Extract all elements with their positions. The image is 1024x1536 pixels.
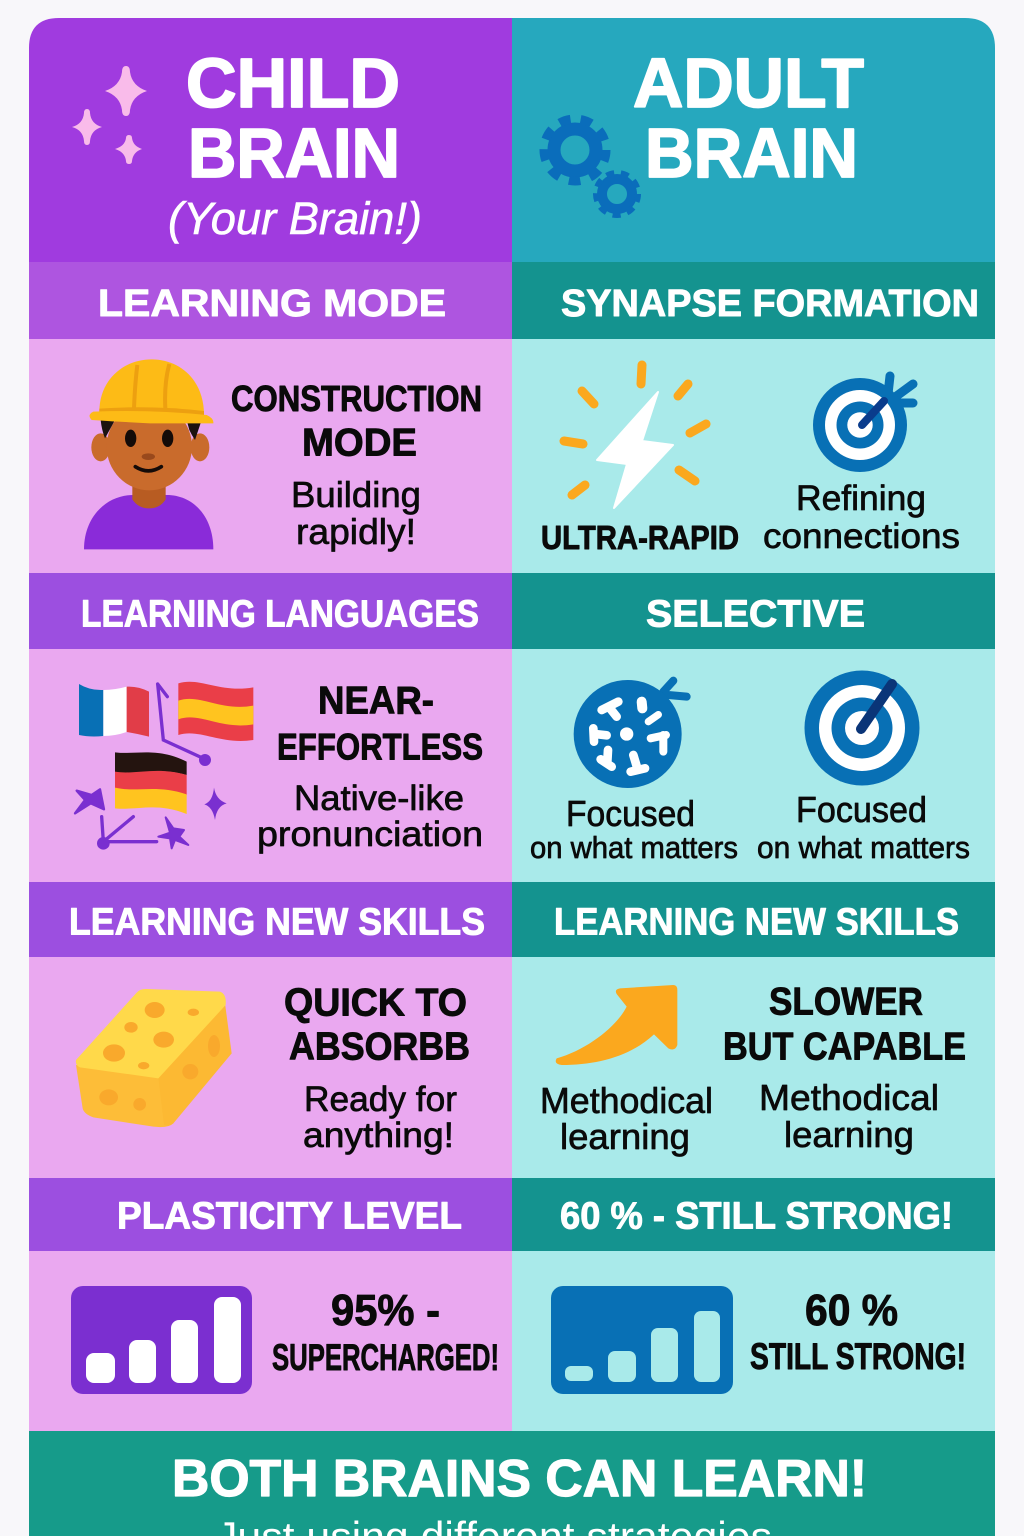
text: construction mode: CONSTRUCTION	[231, 378, 482, 419]
text: quick to absorb: ABSORBB	[289, 1026, 470, 1068]
panel: focused	[512, 649, 995, 882]
section band: still strong	[512, 1178, 995, 1251]
text: near-effortless: pronunciation	[257, 815, 483, 854]
icon: child construction worker	[84, 359, 213, 549]
text: methodical learning right	[759, 1077, 939, 1155]
subheading: your brain: (Your Brain!)	[168, 193, 422, 244]
icon: gears	[544, 119, 638, 215]
section band: synapse formation: SYNAPSE FORMATION	[561, 283, 979, 325]
heading: adult brain: BRAIN	[645, 114, 858, 192]
panel: construction mode	[29, 339, 512, 573]
panel: plasticity adult	[512, 1251, 995, 1431]
text: slower but capable: SLOWER	[769, 980, 923, 1024]
text: quick to absorb: QUICK TO	[284, 982, 467, 1024]
section band: learning new skills child: LEARNING NEW SKILLS	[69, 902, 485, 944]
heading: child brain	[186, 44, 400, 192]
section band: learning languages: LEARNING LANGUAGES	[81, 594, 479, 636]
text: focused right: on what matters	[757, 830, 970, 865]
heading: child brain: CHILD	[186, 44, 400, 122]
icon: language flags and connections	[75, 682, 253, 850]
footer heading: BOTH BRAINS CAN LEARN!	[172, 1450, 867, 1508]
text: methodical learning right: Methodical	[759, 1077, 939, 1118]
text: near-effortless: NEAR-	[318, 680, 434, 722]
icon: target with splash	[813, 376, 913, 472]
text: near-effortless: EFFORTLESS	[277, 726, 483, 768]
icon: sponge	[76, 989, 232, 1127]
text: ultra-rapid: ULTRA-RAPID	[541, 519, 739, 556]
panel: slower but capable	[512, 957, 995, 1178]
section band: learning mode: LEARNING MODE	[98, 283, 446, 325]
section band: learning languages	[29, 573, 512, 649]
icon: upward arrow	[556, 985, 677, 1065]
text: focused left: Focused	[566, 793, 695, 834]
text: 60 percent	[750, 1286, 966, 1377]
icon: filtered neuron circle	[574, 680, 687, 788]
panel: ultra-rapid and refining	[512, 339, 995, 573]
text: construction mode	[231, 378, 482, 552]
text: construction mode: Building	[291, 474, 421, 515]
text: slower but capable: BUT CAPABLE	[723, 1026, 966, 1068]
panel: near-effortless	[29, 649, 512, 882]
text: focused right: Focused	[796, 789, 927, 830]
section band: still strong: 60 % - STILL STRONG!	[560, 1196, 953, 1238]
text: focused right	[757, 789, 970, 865]
chart: 60 percent bars	[551, 1286, 733, 1394]
text: 60 percent: 60 %	[805, 1286, 898, 1335]
text: construction mode: MODE	[302, 422, 417, 464]
section band: learning mode	[29, 262, 512, 339]
text: refining connections: Refining	[796, 479, 926, 518]
icon: purple network	[75, 684, 227, 850]
flag: spain	[178, 682, 253, 741]
icon: lightning bolt	[564, 365, 706, 508]
text: focused left: on what matters	[530, 830, 738, 865]
icon: sparkles	[72, 66, 147, 164]
section band: learning new skills adult: LEARNING NEW SKILLS	[554, 902, 959, 944]
flag: germany	[115, 752, 187, 814]
heading: adult brain: ADULT	[633, 44, 864, 122]
heading: child brain: BRAIN	[188, 114, 400, 192]
chart: 95 percent bars	[71, 1286, 252, 1394]
panel: plasticity child	[29, 1251, 512, 1431]
text: 95 percent: 95% -	[331, 1286, 440, 1335]
section band: synapse formation	[512, 262, 995, 339]
heading: adult brain	[633, 44, 864, 192]
text: methodical learning left: Methodical	[540, 1080, 713, 1121]
text: methodical learning left	[540, 1080, 713, 1157]
footer banner	[29, 1431, 995, 1536]
text: slower but capable	[723, 980, 966, 1068]
icon: target with dart	[804, 670, 920, 786]
panel: adult brain header	[512, 18, 995, 262]
text: 95 percent: SUPERCHARGED!	[272, 1337, 499, 1378]
text: refining connections	[763, 479, 960, 556]
text: 95 percent	[272, 1286, 499, 1378]
text: near-effortless	[257, 680, 483, 854]
text: construction mode: rapidly!	[296, 511, 416, 552]
section band: plasticity level	[29, 1178, 512, 1251]
text: methodical learning left: learning	[560, 1116, 690, 1157]
text: near-effortless: Native-like	[294, 779, 464, 818]
text: methodical learning right: learning	[784, 1114, 914, 1155]
text: quick to absorb: anything!	[303, 1116, 454, 1155]
text: refining connections: connections	[763, 517, 960, 556]
text: quick to absorb: Ready for	[304, 1080, 457, 1119]
panel: child brain header	[29, 18, 512, 262]
section band: learning new skills adult	[512, 882, 995, 957]
section band: selective	[512, 573, 995, 649]
flag: france	[79, 684, 149, 737]
section band: learning new skills child	[29, 882, 512, 957]
text: quick to absorb	[284, 982, 470, 1155]
text: focused left	[530, 793, 738, 865]
section band: plasticity level: PLASTICITY LEVEL	[117, 1196, 462, 1238]
panel: quick to absorb	[29, 957, 512, 1178]
section band: selective: SELECTIVE	[646, 594, 865, 636]
